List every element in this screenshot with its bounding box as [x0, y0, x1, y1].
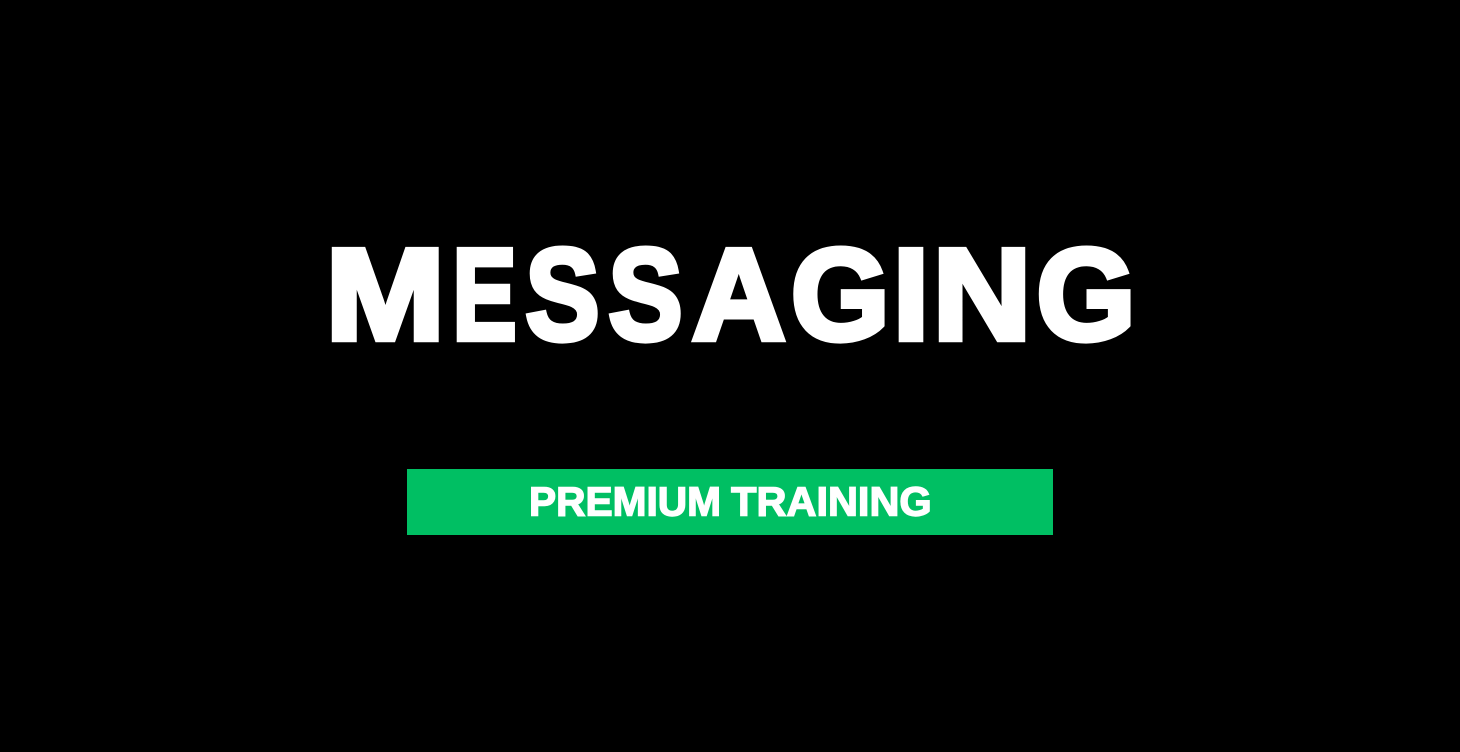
banner: premium training: [407, 469, 1053, 535]
title: N: [933, 221, 1031, 367]
banner background: [407, 469, 1053, 535]
title: A: [692, 221, 786, 367]
title: E: [452, 221, 516, 367]
title: M: [326, 221, 445, 367]
title: I: [893, 221, 929, 367]
banner label: TRAINING: [731, 478, 932, 524]
banner label: PREMIUM: [529, 478, 721, 524]
title: S: [526, 221, 600, 367]
title: G: [791, 221, 890, 367]
title: G: [1036, 221, 1136, 367]
title: S: [608, 221, 682, 367]
